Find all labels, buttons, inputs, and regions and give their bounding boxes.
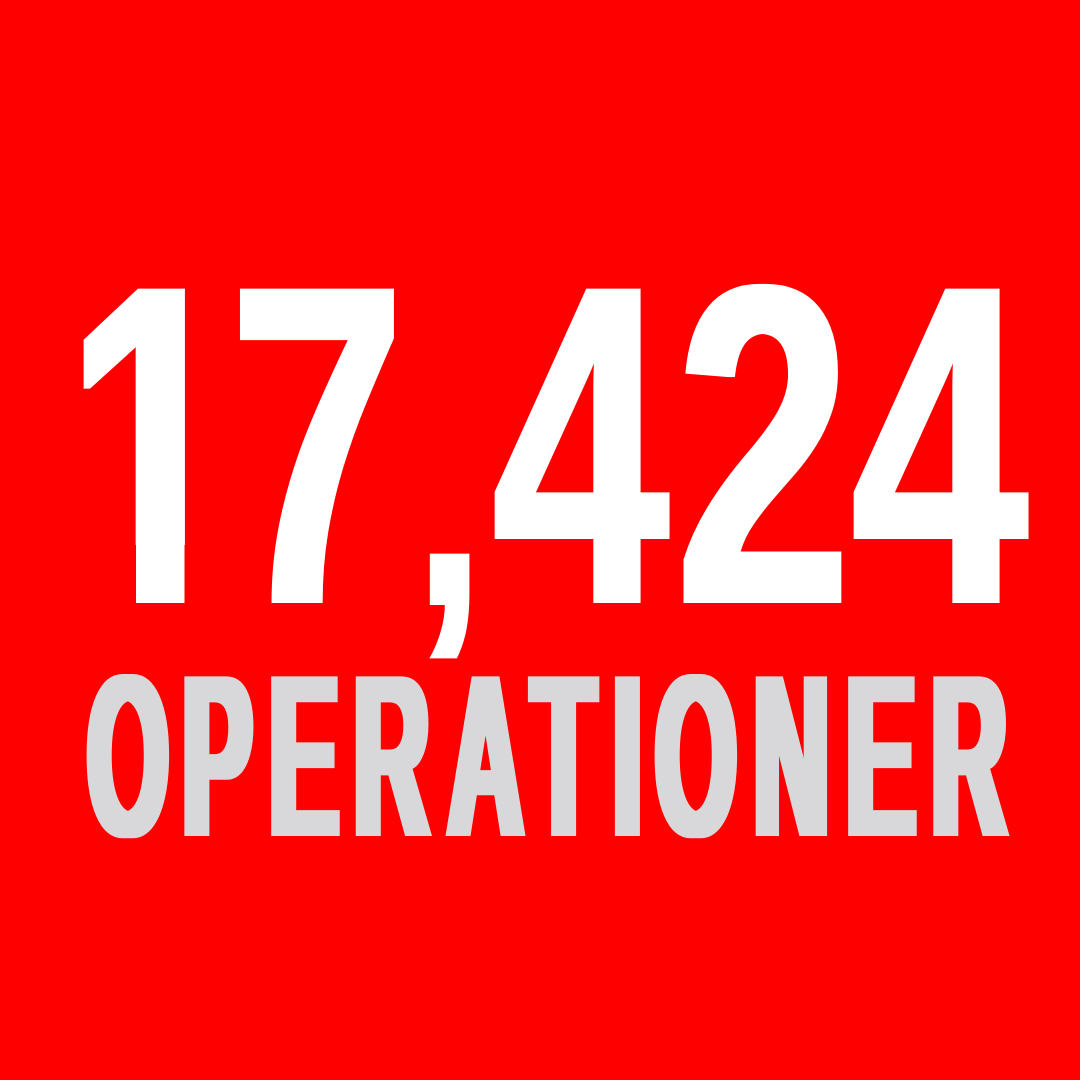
headline number: ,	[416, 293, 482, 678]
label word: OPERATIONER	[87, 627, 1007, 886]
headline number: 424	[493, 191, 1029, 701]
headline number	[65, 191, 1029, 701]
headline number: 17	[65, 191, 405, 701]
